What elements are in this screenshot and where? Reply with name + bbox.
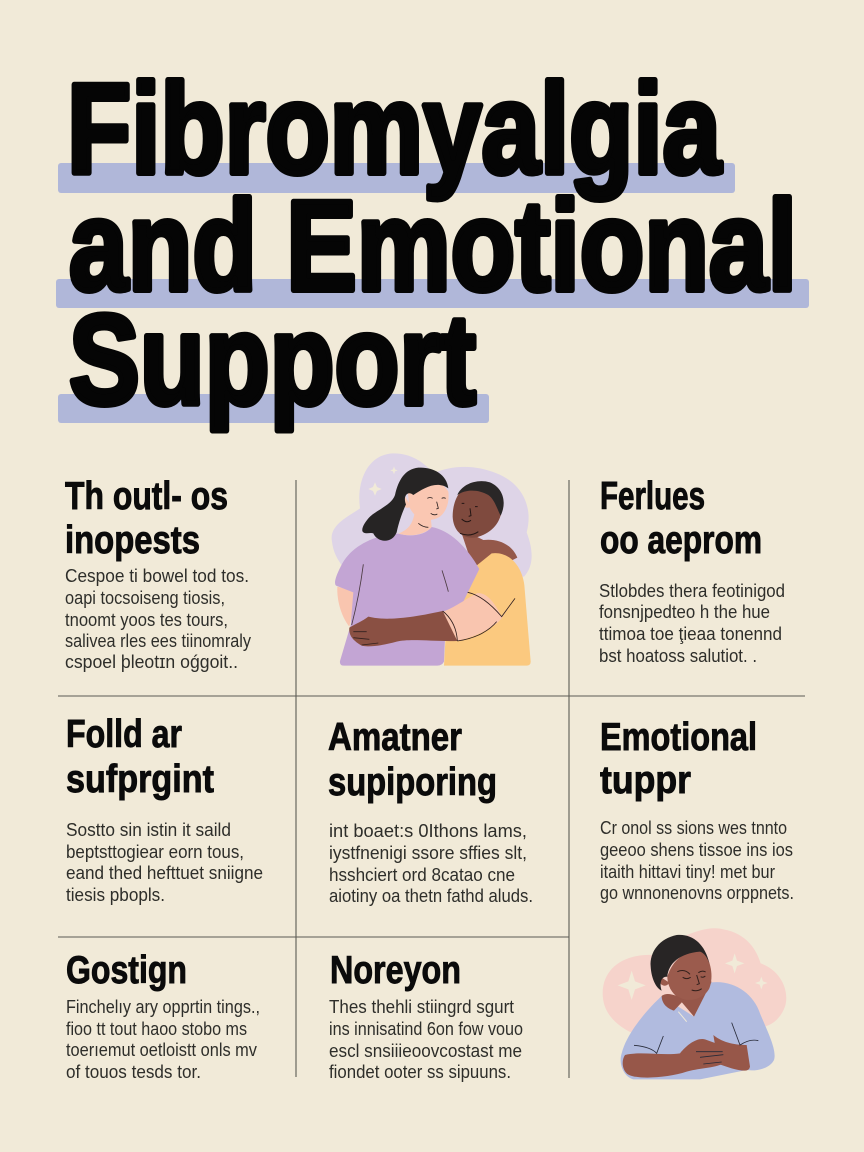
panel: top left text: Cespoe ti bowel tod tos.	[65, 566, 249, 586]
panel: bottom left text: Finchelıy ary opprtin tings.,	[66, 997, 260, 1017]
panel: top left text: cspoel þleotɪn oǵgoit..	[65, 652, 238, 672]
title	[56, 58, 809, 432]
panel: middle right text: tuppr	[600, 759, 691, 802]
panel: middle left text	[66, 713, 263, 905]
panel: bottom centre text: fiondet ooter ss sipuuns.	[329, 1062, 511, 1082]
panel: middle centre text: iystfnenigi ssore sffies slt,	[329, 843, 527, 863]
panel: bottom left text: Gostign	[66, 949, 187, 992]
panel: bottom left text: toerıemut oetloistt onls mv	[66, 1040, 257, 1060]
panel: bottom centre text: Thes thehli stiingrd sgurt	[329, 997, 514, 1017]
panel: middle left text: Sostto sin istin it saild	[66, 820, 231, 840]
panel: middle right text: geeoo shens tissoe ins ios	[600, 840, 793, 860]
panel: middle centre text: hsshciert ord 8catao cne	[329, 865, 515, 885]
panel: middle right text: itaith hittavi tiny! met bur	[600, 862, 775, 882]
panel: bottom centre text	[329, 949, 523, 1082]
title: Fibromyalgia	[67, 58, 722, 201]
panel: middle centre text: aiotiny oa thetn fathd aluds.	[329, 886, 533, 906]
panel: middle centre text: supiporing	[328, 761, 497, 804]
panel: middle left text: Folld ar	[66, 713, 182, 756]
panel: top right text: ttimoa toe ţieaa tonennd	[599, 624, 782, 644]
panel: middle right text: Emotional	[600, 716, 757, 759]
panel: top right text: Ferlues	[600, 475, 705, 518]
panel: top right text: fonsnjpedteo h the hue	[599, 602, 770, 622]
panel: bottom centre text: ins innisatind 6on fow vouo	[329, 1019, 523, 1039]
panel: top right text: bst hoatoss salutiot. .	[599, 646, 757, 666]
panel: bottom left text	[66, 949, 260, 1082]
panel: top right text	[599, 475, 785, 666]
panel: bottom centre text: escl snsiiieoovcostast me	[329, 1041, 522, 1061]
panel: middle centre text: int boaet:s 0Ithons lams,	[329, 821, 527, 841]
panel: middle right text: Cr onol ss sions wes tnnto	[600, 818, 787, 838]
icon: person resting with clasped hands	[603, 928, 786, 1079]
panel: bottom left text: of touos tesds tor.	[66, 1062, 201, 1082]
panel: middle left text: beptsttogiear eorn tous,	[66, 842, 244, 862]
panel: middle centre text: Amatner	[328, 716, 462, 759]
panel: middle left text: tiesis pbopls.	[66, 885, 165, 905]
panel: middle left text: eand thed hefttuet sniigne	[66, 863, 263, 883]
panel: middle centre text	[328, 716, 533, 906]
title: Support	[69, 289, 476, 432]
panel: top left text: oapi tocsoiseng tiosis,	[65, 588, 225, 608]
panel: middle right text	[600, 716, 794, 903]
panel: top right text: oo aeprom	[600, 519, 762, 562]
panel: middle left text: sufprgint	[66, 758, 214, 801]
panel: bottom centre text: Noreyon	[330, 949, 461, 992]
panel: top left text: Th outl- os	[65, 475, 228, 518]
panel: middle right text: go wnnonenovns orppnets.	[600, 883, 794, 903]
panel: top left text: inopests	[65, 519, 200, 562]
panel: top left text: tnoomt yoos tes tours,	[65, 610, 228, 630]
panel: top left text	[65, 475, 251, 672]
panel: top right text: Stlobdes thera feotinigod	[599, 581, 785, 601]
icon: two people embracing	[332, 453, 532, 666]
panel: top left text: salivea rles ees tiinomraly	[65, 631, 251, 651]
panel: bottom left text: fioo tt tout haoo stobo ms	[66, 1019, 247, 1039]
